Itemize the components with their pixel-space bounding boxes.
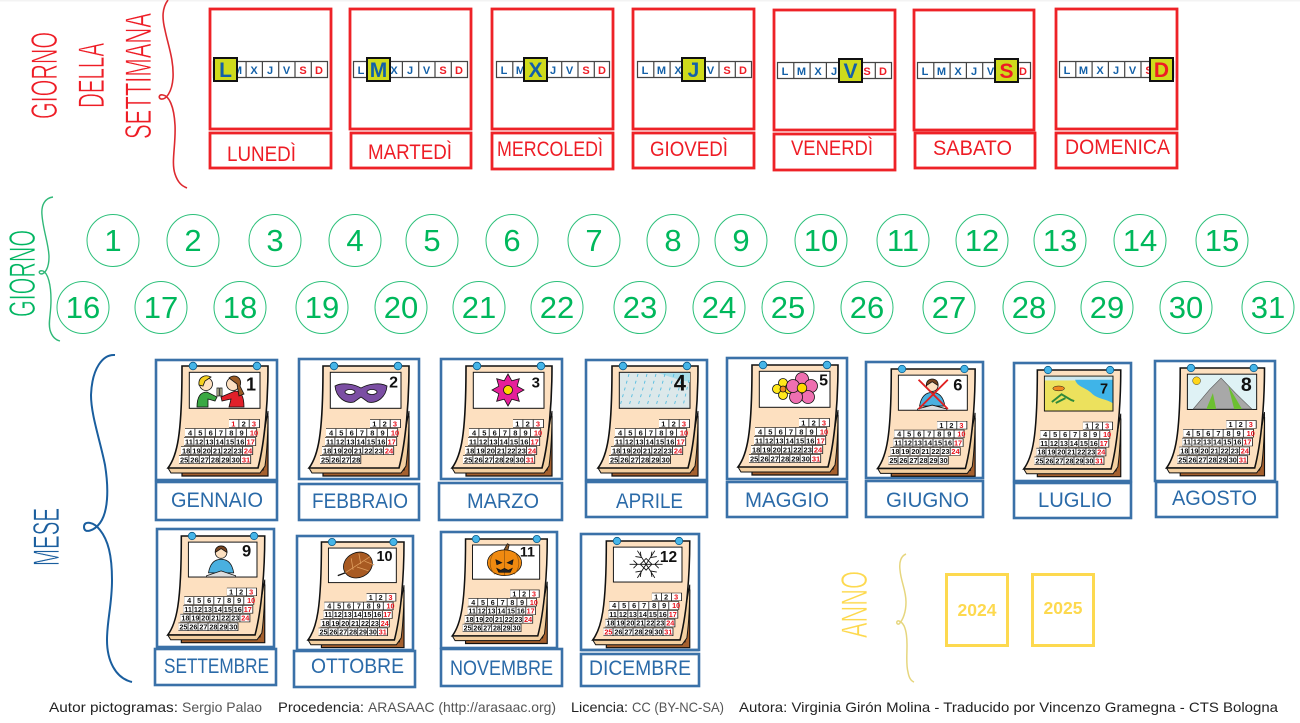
- panel: maggio: [727, 358, 847, 517]
- date grid: 18 19 20 21 22 23 24: [321, 619, 389, 628]
- day numbers: row 2: [57, 282, 1294, 334]
- day numbers: row 1: 2: [184, 223, 202, 258]
- weekday strip: D highlighted: [1060, 58, 1174, 82]
- calendar: gennaio: [168, 362, 268, 476]
- date grid: 11 12 13 14 15 16 17: [324, 610, 391, 619]
- day numbers: row 2: 16: [66, 290, 100, 325]
- date grid: 25 26 27 28 29 30 31: [180, 455, 250, 464]
- panel: sabato: [914, 10, 1035, 168]
- panel: ottobre: [294, 536, 415, 687]
- date grid: 1 2 3: [1229, 420, 1253, 429]
- date grid: 18 19 20 21 22 23 24: [1037, 448, 1105, 457]
- date grid: 25 26 27 28 29 30: [889, 456, 948, 465]
- date grid: 4 5 6 7 8 9 10: [187, 596, 255, 605]
- weekday strip: V highlighted: [778, 59, 892, 83]
- date grid: 11 12 13 14 15 16 17: [468, 607, 535, 615]
- day numbers: row 2: 18: [223, 290, 257, 325]
- day numbers: row 2: 30: [1169, 290, 1203, 325]
- day numbers: row 1: 8: [664, 223, 682, 258]
- date grid: 11 12 13 14 15 16 17: [184, 605, 252, 614]
- day numbers: row 2: 27: [932, 290, 966, 325]
- calendar: ottobre: [308, 538, 404, 648]
- date grid: [609, 419, 690, 464]
- date grid: 25 26 27 28 29 30 31: [750, 454, 820, 463]
- calendar: luglio: [1024, 366, 1121, 477]
- year box: 2024: 2024: [958, 600, 997, 620]
- label: martedì: MARTEDÌ: [368, 141, 452, 164]
- calendar: agosto: [1166, 364, 1264, 476]
- weekday strip: J highlighted: SD: [723, 65, 747, 77]
- date grid: 4 5 6 7 8 9 10: [897, 430, 965, 439]
- day numbers: row 2: 29: [1090, 290, 1124, 325]
- panel: luglio: [1014, 363, 1131, 518]
- month number: 8: [1241, 374, 1252, 396]
- picture: student reading: [207, 546, 236, 577]
- label: luglio: LUGLIO: [1038, 489, 1112, 512]
- year box: 2024: [946, 574, 1008, 646]
- month number: 6: [953, 375, 962, 394]
- date grid: 25 26 27 28 29 30: [464, 624, 520, 632]
- day numbers: row 2: 17: [144, 290, 178, 325]
- panel: aprile: [586, 360, 707, 517]
- weekday strip: L highlighted: [214, 58, 328, 82]
- label: novembre: NOVEMBRE: [450, 657, 553, 680]
- weekday strip: M highlighted: M: [370, 59, 387, 82]
- picture: flowers: [772, 372, 818, 404]
- label: mercoledì: MERCOLEDÌ: [497, 138, 603, 161]
- picture: pumpkin: [487, 544, 522, 576]
- calendar: novembre: [452, 535, 547, 644]
- weekday strip: X highlighted: X: [528, 59, 543, 82]
- day numbers: row 2: 26: [850, 290, 884, 325]
- picture: pink flower: [492, 374, 524, 406]
- day numbers: row 1: 11: [887, 223, 919, 258]
- date grid: 18 19 20 21 22 23 24: [1180, 447, 1250, 456]
- month number: 3: [532, 374, 540, 392]
- day numbers: row 2: 25: [771, 290, 805, 325]
- date grid: 4 5 6 7 8 9 10: [329, 428, 399, 437]
- date grid: 25 26 27 28 29 30 31: [1178, 455, 1247, 464]
- date grid: 1 2 3: [515, 419, 540, 428]
- panel: settembre: [155, 529, 276, 685]
- weekday strip: V highlighted: V: [843, 60, 858, 83]
- weekday strip: V highlighted: SD: [863, 66, 887, 78]
- label: aprile: APRILE: [616, 490, 683, 513]
- footer credits: Autor pictogramas:: [49, 699, 178, 715]
- month number: 4: [674, 370, 687, 396]
- day numbers: row 1: 5: [423, 223, 441, 258]
- date grid: 11 12 13 14 15 16 17: [615, 437, 685, 446]
- month number: 10: [376, 549, 392, 565]
- day numbers: row 1: 13: [1043, 223, 1077, 258]
- label: maggio: MAGGIO: [745, 489, 829, 512]
- weekday strip: M highlighted: LMXJV: [358, 65, 431, 77]
- day numbers: row 1: 4: [346, 223, 364, 258]
- date grid: [319, 593, 396, 636]
- weekday strip: D highlighted: LMXJV: [1064, 65, 1137, 77]
- date grid: 1 2 3: [229, 587, 253, 596]
- date grid: 4 5 6 7 8 9 10: [612, 601, 680, 610]
- panel: marzo: [439, 359, 562, 520]
- weekday strip: X highlighted: LMXJV: [501, 65, 574, 77]
- date grid: 1 2 3: [372, 419, 397, 428]
- brace: green: [39, 197, 60, 341]
- date grid: 1 2 3: [654, 592, 678, 601]
- picture: two people toasting: [197, 376, 244, 407]
- footer credits: Sergio Palao: [182, 699, 262, 715]
- date grid: 1 2 3: [939, 421, 963, 430]
- label: venerdì: VENERDÌ: [791, 137, 873, 160]
- calendar: marzo: [452, 362, 552, 476]
- month number: 1: [246, 374, 256, 394]
- picture: rain: [619, 372, 690, 408]
- date grid: 4 5 6 7 8 9 10: [188, 428, 258, 437]
- weekday strip: S highlighted: SD: [1003, 66, 1027, 78]
- weekday strip: J highlighted: LMXJV: [642, 65, 715, 77]
- day numbers: row 1: 9: [732, 223, 750, 258]
- date grid: 11 12 13 14 15 16 17: [755, 436, 825, 445]
- label: febbraio: FEBBRAIO: [312, 490, 408, 513]
- day numbers: row 2: 23: [623, 290, 657, 325]
- panel: dicembre: [581, 534, 699, 686]
- calendar: giugno: [878, 365, 975, 476]
- label: marzo: MARZO: [467, 490, 539, 513]
- heading: giorno della settimana: [24, 13, 159, 139]
- date grid: 25 26 27 28 29 30: [179, 622, 237, 631]
- panel: gennaio: [156, 360, 277, 520]
- panel: venerdì: [774, 10, 895, 170]
- picture: beach: [1044, 376, 1113, 411]
- panel: febbraio: [299, 359, 419, 520]
- panel: martedì: [350, 9, 471, 168]
- date grid: 25 26 27 28 29 30: [610, 455, 670, 464]
- calendar: aprile: [598, 362, 698, 476]
- date grid: 4 5 6 7 8 9 10: [618, 428, 688, 437]
- label: agosto: AGOSTO: [1172, 487, 1257, 510]
- footer credits: Autora: Virginia Girón Molina - Traducido por Vincenzo Gramegna - CTS Bologna: [739, 699, 1278, 715]
- label: sabato: SABATO: [933, 137, 1012, 160]
- panel: giugno: [866, 362, 983, 517]
- date grid: 18 19 20 21 22 23 24: [606, 619, 674, 628]
- weekday strip: X highlighted: SD: [582, 65, 606, 77]
- label: ottobre: OTTOBRE: [311, 655, 404, 678]
- month number: 11: [520, 545, 535, 561]
- footer credits: Licencia:: [571, 699, 628, 715]
- weekday strip: J highlighted: J: [688, 59, 699, 82]
- footer credits: ARASAAC (http://arasaac.org): [368, 699, 556, 715]
- date grid: 25 26 27 28: [321, 455, 360, 464]
- date grid: 25 26 27 28 29 30 31: [604, 627, 672, 636]
- year box: 2025: [1032, 574, 1094, 646]
- date grid: 25 26 27 28 29 30 31: [1035, 456, 1103, 465]
- date grid: [320, 419, 401, 464]
- date grid: 11 12 13 14 15 16 17: [326, 437, 396, 446]
- date grid: 18 19 20 21 22 23 24: [466, 616, 532, 624]
- month number: 5: [819, 372, 828, 390]
- month number: 7: [1100, 381, 1108, 397]
- year box: 2025: 2025: [1044, 598, 1083, 618]
- day numbers: row 1: 15: [1205, 223, 1239, 258]
- weekday strip: S highlighted: S: [999, 60, 1014, 83]
- brace: blue: [84, 355, 132, 682]
- date grid: 18 19 20 21 22 23 24: [612, 446, 683, 455]
- month number: 12: [660, 549, 678, 566]
- footer credits: [49, 699, 1278, 715]
- day numbers: row 1: 14: [1123, 223, 1157, 258]
- day numbers: row 1: 3: [266, 223, 284, 258]
- picture: autumn leaf: [338, 547, 377, 583]
- date grid: 1 2 3: [661, 419, 686, 428]
- day numbers: row 2: 31: [1251, 290, 1285, 325]
- date grid: 11 12 13 14 15 16 17: [1183, 438, 1251, 447]
- heading: giorno: GIORNO: [2, 230, 43, 317]
- date grid: 11 12 13 14 15 16 17: [469, 437, 539, 446]
- date grid: [1034, 421, 1113, 465]
- panel: mercoledì: [492, 9, 613, 169]
- label: dicembre: DICEMBRE: [589, 657, 691, 680]
- date grid: 4 5 6 7 8 9 10: [1186, 429, 1255, 438]
- footer credits: Procedencia:: [278, 699, 364, 715]
- day numbers: row 1: 1: [104, 223, 122, 258]
- panel: lunedì: [210, 9, 331, 168]
- date grid: 18 19 20 21 22 23 24: [181, 614, 249, 623]
- date grid: 11 12 13 14 15 16 17: [894, 438, 962, 447]
- date grid: [749, 418, 830, 463]
- date grid: 11 12 13 14 15 16 17: [185, 437, 255, 446]
- day numbers: row 1: 7: [585, 223, 603, 258]
- weekday strip: S highlighted: LMXJV: [922, 66, 995, 78]
- footer credits: CC (BY-NC-SA): [632, 699, 724, 715]
- date grid: 25 26 27 28 29 30 31: [464, 455, 534, 464]
- picture: crossed-out student: [918, 379, 948, 410]
- weekday strip: J highlighted: [638, 58, 752, 82]
- date grid: 18 19 20 21 22 23 24: [466, 446, 537, 455]
- calendar: febbraio: [309, 362, 409, 476]
- label: domenica: DOMENICA: [1065, 136, 1170, 159]
- date grid: 18 19 20 21 22 23 24: [891, 447, 961, 456]
- date grid: 18 19 20 21 22 23 24: [323, 446, 394, 455]
- date grid: 4 5 6 7 8 9 10: [327, 602, 394, 611]
- date grid: 4 5 6 7 8 9 10: [758, 427, 828, 436]
- panel: novembre: [441, 532, 562, 686]
- panel: giovedì: [633, 9, 754, 168]
- weekday strip: L highlighted: L: [219, 59, 232, 82]
- weekday strip: L highlighted: LMXJV: [218, 65, 291, 77]
- brace: red: [159, 0, 187, 188]
- date grid: 4 5 6 7 8 9 10: [1043, 430, 1111, 439]
- date grid: 11 12 13 14 15 16 17: [1040, 439, 1108, 448]
- day numbers: row 1: 10: [804, 223, 838, 258]
- weekday strip: D highlighted: D: [1154, 59, 1169, 82]
- date grid: [179, 419, 260, 464]
- date grid: 4 5 6 7 8 9 10: [471, 599, 538, 607]
- day numbers: row 2: 20: [384, 290, 418, 325]
- brace: yellow: [897, 554, 914, 682]
- date grid: [1177, 420, 1257, 464]
- date grid: [603, 592, 682, 636]
- weekday strip: M highlighted: [354, 58, 468, 82]
- date grid: 1 2 3: [231, 419, 256, 428]
- label: giugno: GIUGNO: [886, 489, 969, 512]
- heading: anno: ANNO: [834, 571, 875, 638]
- panel: agosto: [1155, 361, 1277, 517]
- date grid: 18 19 20 21 22 23 24: [182, 446, 253, 455]
- date grid: 1 2 3: [512, 590, 536, 598]
- day numbers: row 1: 12: [965, 223, 999, 258]
- label: giovedì: GIOVEDÌ: [650, 138, 728, 161]
- month number: 2: [389, 374, 398, 392]
- date grid: 11 12 13 14 15 16 17: [609, 610, 677, 619]
- month number: 9: [242, 542, 251, 560]
- date grid: 1 2 3: [1085, 421, 1109, 430]
- weekday strip: D highlighted: SD: [1145, 65, 1169, 77]
- day numbers: row 1: [87, 214, 1248, 266]
- date grid: 25 26 27 28 29 30 31: [320, 627, 387, 636]
- label: lunedì: LUNEDÌ: [227, 143, 296, 166]
- label: gennaio: GENNAIO: [171, 489, 263, 512]
- day numbers: row 1: 6: [503, 223, 521, 258]
- date grid: [888, 421, 967, 465]
- day numbers: row 2: 24: [702, 290, 736, 325]
- date grid: [463, 590, 540, 632]
- calendar: maggio: [738, 361, 838, 475]
- day numbers: row 2: 28: [1012, 290, 1046, 325]
- weekday strip: X highlighted: [496, 58, 610, 82]
- day numbers: row 2: 22: [540, 290, 574, 325]
- picture: mountain: [1187, 374, 1257, 409]
- date grid: 1 2 3: [801, 418, 826, 427]
- calendar: dicembre: [593, 537, 690, 648]
- day numbers: row 2: 21: [462, 290, 496, 325]
- calendar: settembre: [168, 532, 265, 643]
- heading: mese: MESE: [26, 508, 67, 566]
- label: settembre: SETTEMBRE: [164, 655, 269, 678]
- day numbers: row 2: 19: [305, 290, 339, 325]
- date grid: 1 2 3: [369, 593, 393, 602]
- picture: carnival mask: [335, 384, 387, 402]
- date grid: [178, 587, 257, 631]
- date grid: 18 19 20 21 22 23 24: [752, 445, 823, 454]
- picture: snowflake: [630, 551, 663, 578]
- weekday strip: L highlighted: SD: [299, 65, 323, 77]
- panel: domenica: [1056, 9, 1177, 168]
- weekday strip: V highlighted: LMXJV: [782, 66, 855, 78]
- date grid: 4 5 6 7 8 9 10: [472, 428, 542, 437]
- weekday strip: M highlighted: SD: [439, 65, 463, 77]
- weekday strip: S highlighted: [918, 59, 1030, 83]
- date grid: [463, 419, 544, 464]
